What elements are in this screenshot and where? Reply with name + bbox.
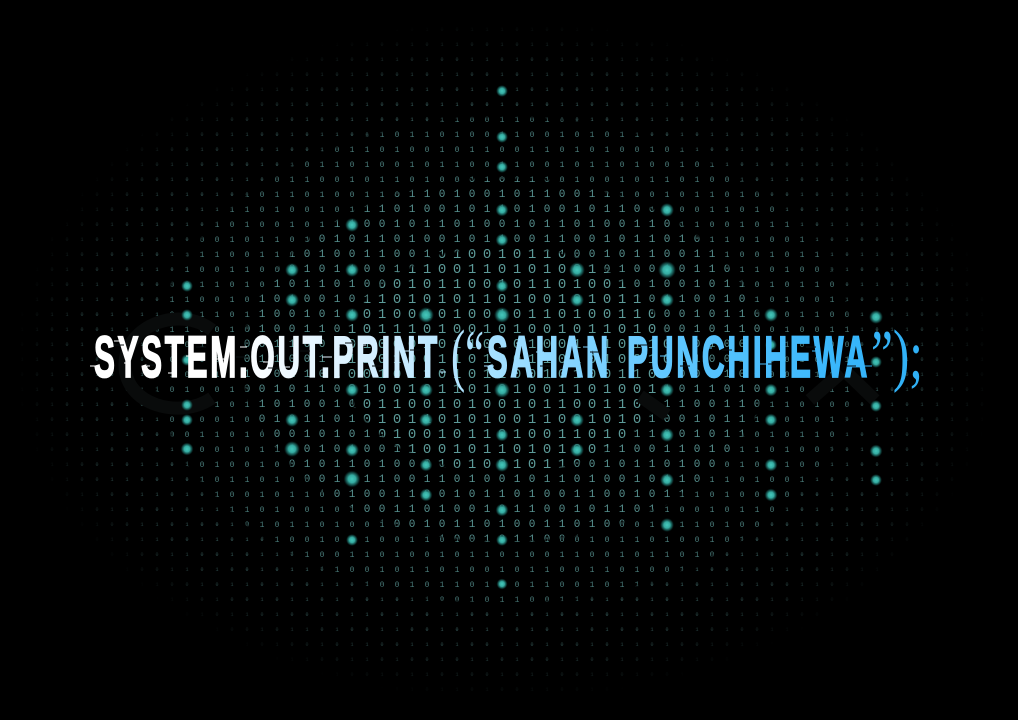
title glitch slices	[90, 341, 872, 373]
watermark: faint ghost letters	[125, 319, 875, 415]
binary field: central large digits: 0110010101101001011010011010010110100101100 1011010010110011010010110010110100110100101 0100110101001011001101010011010010110011010 1011001011010010110010110100101100110100101 0100101001011010101101001010110010110100110 1010110101001001010010110100110101001011001 0101001100101110100101001011010011010010110 1100110101010001011010100101011010010110011 0010101010110100110100110101001011001010110 1101010011001011010110010100110101001011010 0100101011010010110101001101001010110100101 1011010100101100101001011001101010010110100 0100101001101011010100110010100101011001011 1010110100010100101101001101010110100101010 0101001011101010010110101001010010110100110 1101010100010110101001011001010101001010101 0010101011010010100101101010110100101011010	[198, 232, 843, 488]
title text: SAHAN: SAHAN	[487, 325, 611, 390]
binary field: outer small digits: 01101001011010010110100101101001110100101001011010010110100101101001 10010110100110101001011010010110010110101100101001101001011010011010 01011010110010100110101001101001101001010110100110010110101001100101 10100101001101011001010110010110010110100101011010100101001011011010 01101001101001010110100101101001101010010110010110010110101001010110 10010110010110101001011010010110010101101001101001101001010110101001 01100101101001100110100110010110100110010101101001011010011001010110 10011010010110011001011001101001011001101010010110100101100110101001 01011001101001011010011010010110100101101001011001011010100101011010 10100110010110100101100101101001011010010110100110100101011010100101 01011010100101011010010110100110100101101001011001011010100101100110 10100101011010100101101001011001011010010110100110100101011001011001 01100110100101100110100101101001100101101001011001011010010110101001 10011001011010011001011010010110011010010110100110100101101001010110 01100101101001011010011001011010011001010110100101100110100101101001 10011010010110100101100110100101100110101001011010011001011010010110 01101001011010010110011010010110011001011010010110100110100101101001 10010110100101101001100101101001100110100101101001011001011010010110 01100110100101101001011010011001011010010110100110010110100101101001 10011001011010010110100101100110100101101001011001101001011010010110 01101001100101101001011001101001011010010110011001011010010110100101 10010110011010010110100110010110100101101001100110100101101001011010 01100101101001100110100101101001011001101001011010010110011010010101 10011010010110011001011010010110100110010110100101101001100101101010 01101001011001101001100101101001011001101001011010010110011010010101 10010110100110010110011010010110100110010110100101101001100101101010 01101001011001101001100101101001011001101001011010010110011010010101 10010110100110010110011010010110100110010110100101101001100101101010 01100110100101100101101001100101101001011010011001011010011001101001 10011001011010011010010110011010010110100101100110100101100110010110 01101001100101100101101001011010011001011010010110100110010110100101 10010110011010011010010110100101100110100101101001011001101001011010 01100101100101101001100110100101101001011001101001011010010110011001 10011010011010010110011001011010010110100110010110100101101001100110 01011001011001101001011010011001011010010110011010010110100101100101 10100110100110010110100101100110100101101001100101101001011010011010 01100101100110100101100101101001100110100101101001011001011010010110 10011010011001011010011010010110011001011010010110100110100101101001 01011001100110100101101001011001100101101001011010010110011010010110 10100110011001011010010110100110011010010110100101101001100101101001 01100110010110100101101001100101100101101001011010011001101001011010 10011001101001011010010110011010011010010110100101100110010110100101 01101001010110100101100110100101101001100101101001011001011010011010 10010110101001011010011001011010010110011010010110100110100101100101 01100101011010011001011010010110100110010110100101100101101001011010 10011010100101100110100101101001011001101001011010011010010110100101	[6, 27, 1018, 708]
glowing data dots	[180, 85, 883, 590]
binary field: mid-large digits: 0100101001011010011010100110100101100101101001011010 1101001010110010110011010010110100110010110100101101 1010011001010110101001100101101001101001011001101001 0101100110100101001011010010110011001011010010110100 1001011001101010011010010110100101100110100101100110 1010100110010101100101101001011010011001011010010110 0101011001101001011010010110011001011010010110100110 1100101001011010011001100101101001011001101001011010 0011010110100101100101101001100110100101101001100101 1010010110010110100110100101100101101001011010011001 0110100101101001011001011010010110100110010110100110 1001101001100101101010011010010110011001011010010110 0110010110100110010101100101101001101001011010010110 1001011010011001101010011010010110010110100101100101 0100110100110010101101001100101101001011001101001011 1011001011001101010010110100110010110100110010110100 0101101010010110100110100101101001100101101001011010 1100101001101001011001011010011010010110011010010110 0011010110010110100110100101100101101001011010011001 1010011001100101011001101001011010011001011010010110 0101100110011010100110010110100101100110100101101001 1010011001100101101001011010011001011010010110011010 0110010110101001011001101001011010010110011010010110 1001101001010110100110010110100110010110100101101001 0110010110100101100110100101100101101001100110100101 1001101001011010011001011010011010010110010110100110 0110100101100110100110100101100101101001011010011001 1001011010011001011001011010011010010110100110010110 0110100110010110100110100101100101101001011001101001	[109, 144, 889, 576]
title text: closing quote, parenthesis, semicolon: ”);	[871, 317, 923, 394]
title text: opening parenthesis and quote: (“	[451, 317, 484, 394]
binary field: mid-small digits: 01011001101001011010011010010110100101101001011001011010100101011010 10100110010110100101100101101001011010010110100110100101011010100101 01100110100101100110100101101001100101101001011001011010010110101001 10011001011010011001011010010110011010010110100110100101101001010110 01100101101001011010011001011010011001010110100101100110100101101001 10011010010110100101100110100101100110101001011010011001011010010110 01101001011010010110011010010110011001011010010110100110100101101001 10010110100101101001100101101001100110100101101001011001011010010110 11010100101101001011010011001010110100110100101101001011001011010010 10100110100101011010010110011010010110100101100110100101101001011010 01101001100101101001011001101001011010010110011001011010010110100101 10010110011010010110100110010110100101101001100110100101101001011010 01100101101001100110100101101001011001101001011010010110011010010101 10011010010110011001011010010110100110010110100101101001100101101010 01101001011001101001100101101001011001101001011010010110011010010101 10010110100110010110011010010110100110010110100101101001100101101010 01101001011001101001100101101001011001101001011010010110011010010101 10010110100110010110011010010110100110010110100101101001100101101010 01100110100101100101101001100101101001011010011001011010011001101001 10011001011010011010010110011010010110100101100110100101100110010110 01101001100101100101101001011010011001011010010110100110010110100101 10010110011010011010010110100101100110100101101001011001101001011010 01100101100101101001100110100101101001011001101001011010010110011001 10011010011010010110011001011010010110100110010110100101101001100110 01011001011001101001011010011001011010010110011010010110100101100101 10100110100110010110100101100110100101101001100101101001011010011010 01100101100110100101100101101001100110100101101001011001011010010110 10011010011001011010011010010110011001011010010110100110100101101001 01011001100110100101101001011001100101101001011010010110011010010110 10100110011001011010010110100110011010010110100101101001100101101001 01100110010110100101101001100101100101101001011010011001101001011010 10011001101001011010010110011010011010010110100101100110010110100101 01101001010110100101100110100101101001100101101001011001011010011010 10010110101001011010011001011010010110011010010110100110100101100101 01100101011010011001011010010110100110010110100101100101101001011010 10011010100101100110100101101001011001101001011010011010010110100101 01011010011010010110010110100101100110100101101001011010011001011010 10100101100101101001101001011001100101101001011010010110100110100101 01101001011010010110100101100110100101101001011001011010011010010110	[5, 71, 1018, 650]
title: code statement with name	[94, 317, 923, 394]
title text: SYSTEM.OUT.PRINT: SYSTEM.OUT.PRINT	[94, 325, 440, 390]
